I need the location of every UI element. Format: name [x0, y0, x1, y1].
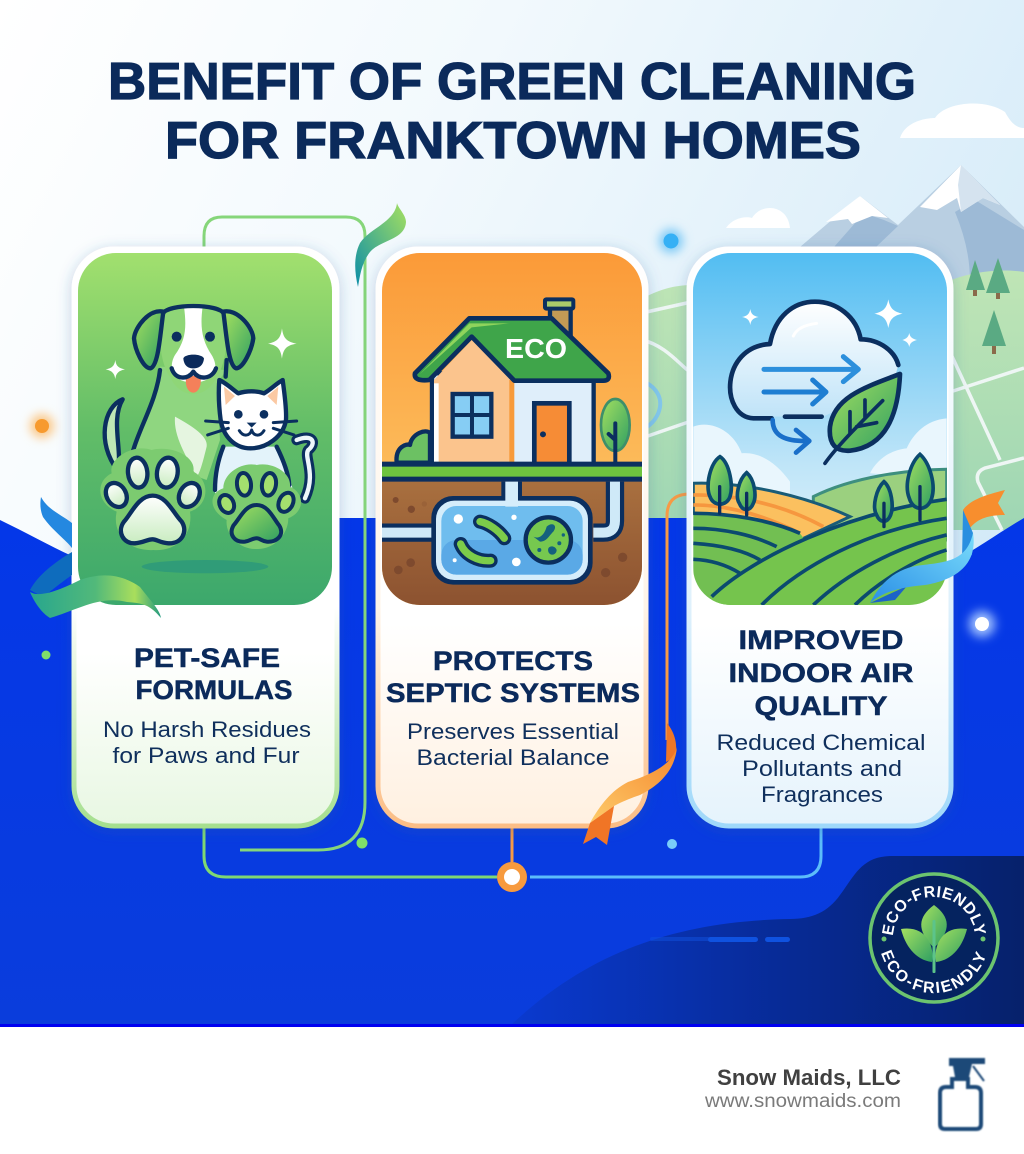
- door: [534, 403, 569, 465]
- heading: IMPROVED: [738, 625, 904, 655]
- tank: [431, 496, 593, 585]
- illustration: cloud, air, leaf and fields: [693, 253, 947, 607]
- background: green hills and roads: [640, 258, 1024, 530]
- panel: pet-safe formulas: [74, 249, 337, 826]
- description: Preserves Essential: [407, 719, 619, 744]
- panel: pet-safe formulas: FORMULAS: [136, 675, 292, 705]
- illustration: dog, cat and paws: [78, 253, 332, 605]
- bacteria: [480, 522, 504, 538]
- decorative dashes: [650, 937, 790, 942]
- heading: PROTECTS: [433, 646, 593, 676]
- title: [108, 53, 916, 170]
- panel: protects septic systems: Bacterial Balance: [416, 745, 610, 770]
- dog body: [133, 367, 227, 480]
- left field: [693, 513, 804, 605]
- big paw: [100, 448, 205, 550]
- dark corner shape: [510, 856, 1024, 1026]
- panel: protects septic systems: [378, 249, 647, 826]
- chimney: [550, 305, 571, 335]
- connector: orange side link: [667, 494, 690, 740]
- description: Reduced Chemical: [716, 730, 926, 755]
- ribbon: orange: [583, 723, 677, 845]
- panel: improved indoor air quality: Fragrances: [761, 782, 883, 807]
- air arrows: [764, 357, 858, 453]
- ribbon: left green and blue: [30, 497, 161, 618]
- roof: [415, 318, 609, 381]
- panel: improved indoor air quality: QUALITY: [754, 691, 888, 721]
- ribbon: top green: [355, 203, 406, 287]
- pipes: [380, 482, 615, 533]
- bottom accent line and footer: [0, 1024, 1024, 1027]
- bubbles: [454, 514, 463, 524]
- glowing dots: [30, 229, 995, 849]
- panel: pet-safe formulas: for Paws and Fur: [112, 743, 300, 768]
- window: [453, 394, 491, 437]
- title: BENEFIT OF GREEN CLEANING: [108, 53, 916, 111]
- head: [160, 307, 227, 394]
- panel: improved indoor air quality: INDOOR AIR: [728, 658, 914, 688]
- illustration: eco house and septic tank: [380, 253, 647, 607]
- leaf: [830, 374, 900, 451]
- badge top text: ECO-FRIENDLY: [882, 886, 986, 935]
- connector: top green link: [204, 217, 365, 850]
- panel: improved indoor air quality: Pollutants and: [742, 756, 902, 781]
- house walls: [432, 373, 594, 465]
- right field: [712, 499, 947, 607]
- badge bottom text: ECO-FRIENDLY: [881, 950, 985, 994]
- background: blue lower field: [0, 518, 1024, 1026]
- background: mountains: [800, 165, 1024, 300]
- description: No Harsh Residues: [103, 717, 311, 742]
- heading: PET-SAFE: [134, 643, 280, 673]
- background: clouds: [726, 103, 1024, 228]
- background clouds: [693, 424, 790, 494]
- orange field: [693, 483, 850, 540]
- small paw: [212, 464, 301, 549]
- panel: protects septic systems: SEPTIC SYSTEMS: [386, 678, 640, 708]
- bush: [397, 431, 430, 463]
- footer brand name: Snow Maids, LLC: [717, 1065, 901, 1090]
- tail: [105, 399, 123, 470]
- card frame: [74, 249, 337, 826]
- card frame: [689, 249, 951, 826]
- card frame: [378, 249, 646, 826]
- tree: [601, 399, 630, 451]
- far hill: [813, 469, 947, 540]
- trees: [708, 454, 933, 521]
- sparkles: [742, 299, 917, 347]
- sparkles: [268, 328, 297, 359]
- cloud: [730, 302, 898, 418]
- connector node: [497, 862, 527, 892]
- footer url: www.snowmaids.com: [704, 1091, 901, 1112]
- connector: bottom green link: [204, 826, 497, 877]
- ECO roof label: ECO: [505, 333, 567, 364]
- connector: bottom blue link: [530, 826, 821, 877]
- connector: orange vertical: [510, 826, 514, 862]
- ribbon: right blue and orange: [870, 490, 1005, 603]
- panel: improved indoor air quality: [689, 249, 951, 826]
- badge leaves: [921, 905, 947, 948]
- cat head: [219, 380, 286, 448]
- soil: [380, 480, 647, 607]
- icon: spray bottle: [940, 1058, 985, 1129]
- cat body: [215, 447, 293, 493]
- ground: [380, 462, 647, 482]
- badge: eco-friendly: [868, 872, 1000, 1004]
- title: FOR FRANKTOWN HOMES: [165, 112, 861, 170]
